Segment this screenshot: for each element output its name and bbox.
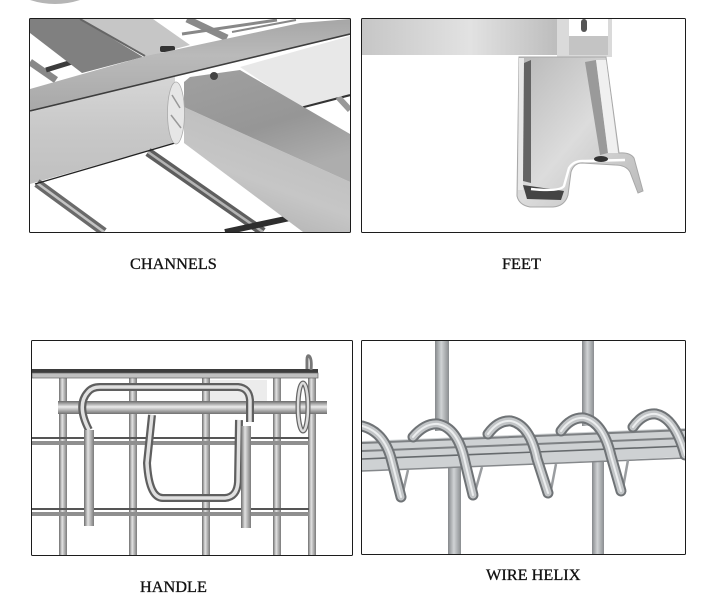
- label: handle: HANDLE: [140, 577, 207, 596]
- rear wires: [30, 19, 350, 110]
- label: wire helix: WIRE HELIX: [486, 565, 581, 584]
- bar end piece: [557, 19, 612, 57]
- panel border: feet: [362, 18, 686, 232]
- panel: wire helix: [362, 341, 685, 554]
- horizontal bar: [362, 19, 559, 55]
- vertical wires: [435, 341, 449, 431]
- long rail: [30, 19, 350, 111]
- horizontal tube: [58, 401, 327, 414]
- foot bracket: [517, 57, 643, 207]
- handle legs: [84, 430, 94, 526]
- horizontal wires: [32, 437, 309, 439]
- front wires: [37, 183, 104, 232]
- U handle: [147, 415, 239, 498]
- horizontal bars: [362, 428, 685, 471]
- label: channels: CHANNELS: [130, 254, 217, 273]
- panel: channels: [30, 19, 350, 232]
- handle hanger: [82, 387, 250, 430]
- front channel face: [30, 76, 175, 184]
- label: feet: FEET: [502, 254, 541, 273]
- cross channel: [184, 107, 350, 232]
- top rail: [32, 369, 318, 373]
- foot outer rim: [517, 57, 643, 207]
- helix loops: [362, 414, 685, 497]
- ring: [298, 383, 308, 431]
- panel: handle: [32, 354, 327, 555]
- helix small ends: [403, 460, 628, 492]
- vertical wires: [59, 378, 67, 555]
- panel: feet: [362, 19, 644, 208]
- decorative circle cropped at top: [30, 0, 80, 4]
- panel border: channels: [30, 18, 350, 232]
- panel border: wire helix: [362, 340, 686, 554]
- weld: [168, 82, 184, 144]
- panel border: handle: [32, 340, 352, 556]
- rear plates: [30, 19, 143, 73]
- rear channel face: [240, 36, 350, 107]
